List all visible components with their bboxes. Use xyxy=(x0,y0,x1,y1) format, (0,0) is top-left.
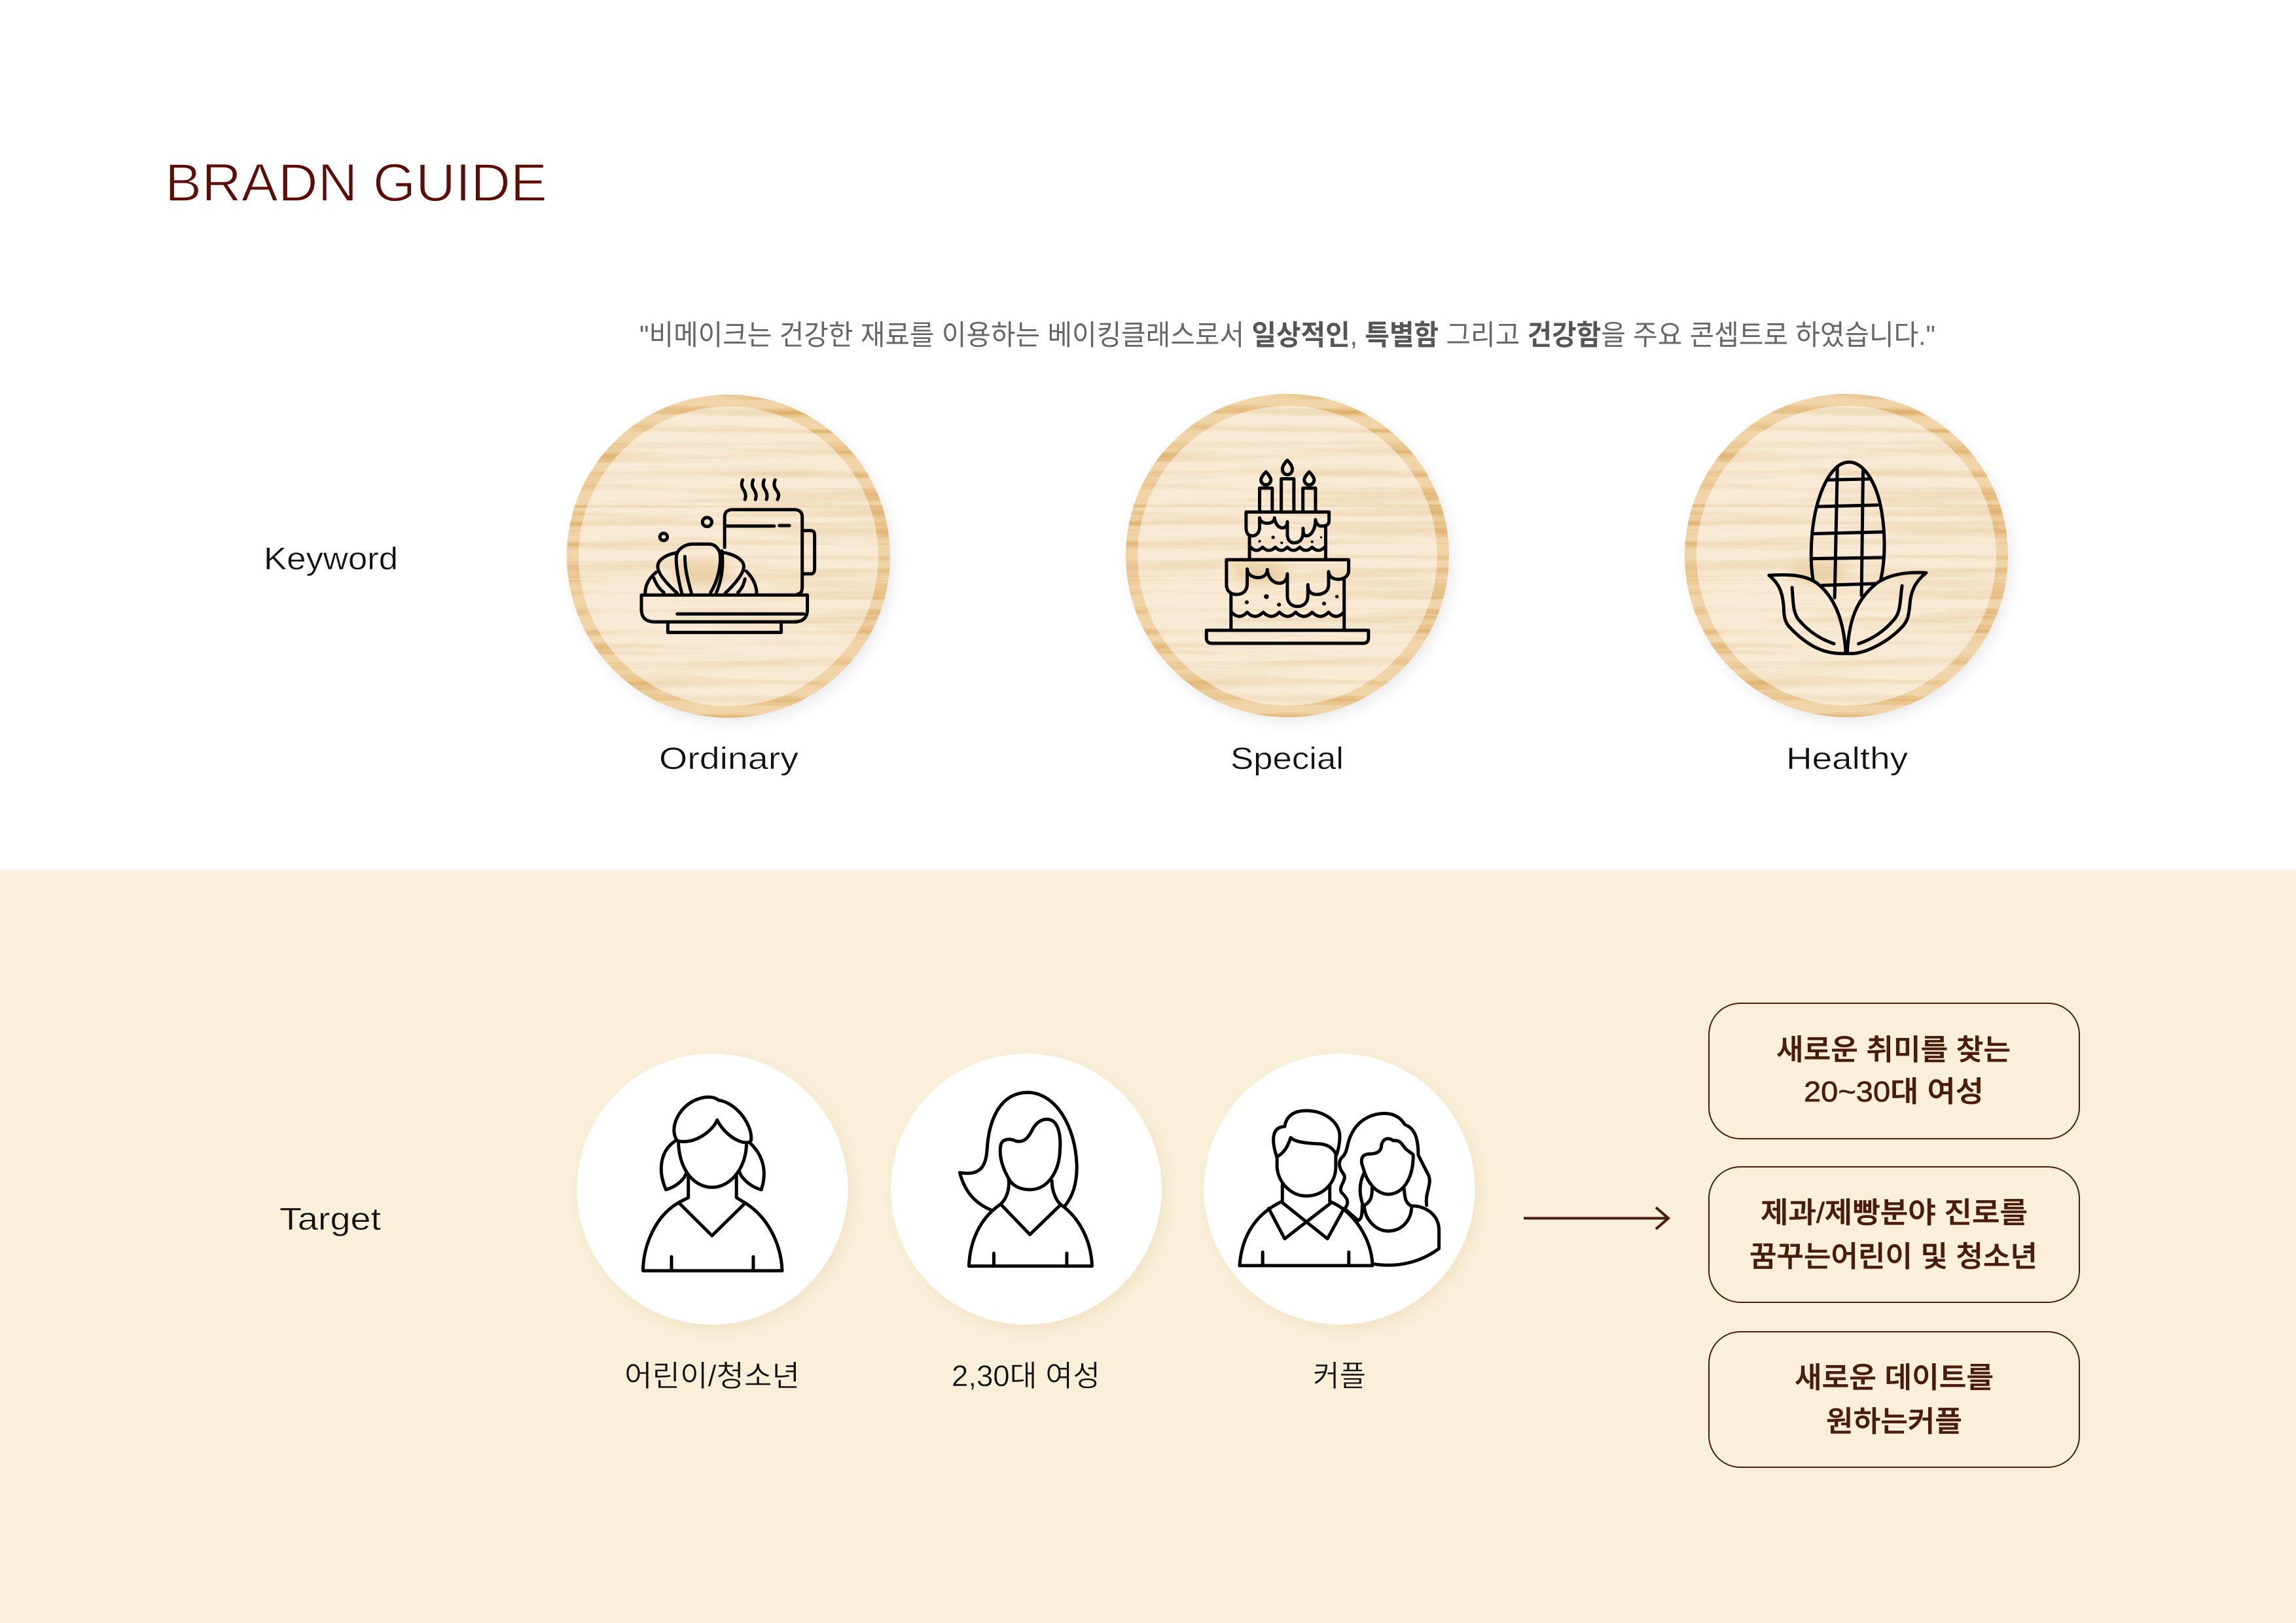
keyword: Healthy xyxy=(1683,392,2011,776)
callout: hobby-seeking women xyxy=(1709,1003,2079,1139)
callout: couples seeking new dates: 새로운 데이트를 xyxy=(1795,1362,1994,1394)
callout: couples seeking new dates xyxy=(1709,1332,2079,1467)
keyword label: Ordinary xyxy=(659,741,799,776)
target label: 커플 xyxy=(1313,1359,1366,1393)
background: beige target section xyxy=(0,870,2296,1623)
keyword: Special xyxy=(1124,392,1452,776)
callout: aspiring bakers xyxy=(1709,1167,2079,1302)
background: white upper section xyxy=(0,0,2296,870)
target: women in their 20s and 30s xyxy=(891,1054,1166,1393)
callout: aspiring bakers: 꿈꾸는어린이 및 청소년 xyxy=(1749,1241,2037,1273)
callout: hobby-seeking women: 20~30대 여성 xyxy=(1804,1076,1984,1108)
icon: girl xyxy=(643,1097,782,1271)
icon: birthday cake xyxy=(1206,460,1369,643)
icon: croissant and mug xyxy=(641,480,815,632)
keyword label: Healthy xyxy=(1786,741,1909,776)
icon: woman xyxy=(960,1092,1092,1266)
target label: 2,30대 여성 xyxy=(952,1359,1100,1393)
target: children and teens xyxy=(577,1054,852,1393)
icon: couple xyxy=(1240,1111,1439,1266)
label: Target: Target xyxy=(279,1202,381,1237)
target: couples xyxy=(1204,1054,1479,1393)
brand concept quote: "비메이크는 건강한 재료를 이용하는 베이킹클래스로서 일상적인, 특별함 그리고 건강함을 주요 콘셉트로 하였습니다." xyxy=(639,320,1935,351)
callout: aspiring bakers: 제과/제빵분야 진로를 xyxy=(1761,1197,2028,1229)
icon: corn xyxy=(1769,462,1926,654)
arrow xyxy=(1524,1207,1668,1229)
target label: 어린이/청소년 xyxy=(624,1359,800,1393)
callout: hobby-seeking women: 새로운 취미를 찾는 xyxy=(1776,1034,2011,1066)
title: BRADN GUIDE xyxy=(165,153,547,213)
label: Keyword: Keyword xyxy=(264,542,398,577)
keyword label: Special xyxy=(1230,741,1344,776)
keyword: Ordinary xyxy=(565,393,893,776)
callout: couples seeking new dates: 원하는커플 xyxy=(1826,1406,1962,1438)
